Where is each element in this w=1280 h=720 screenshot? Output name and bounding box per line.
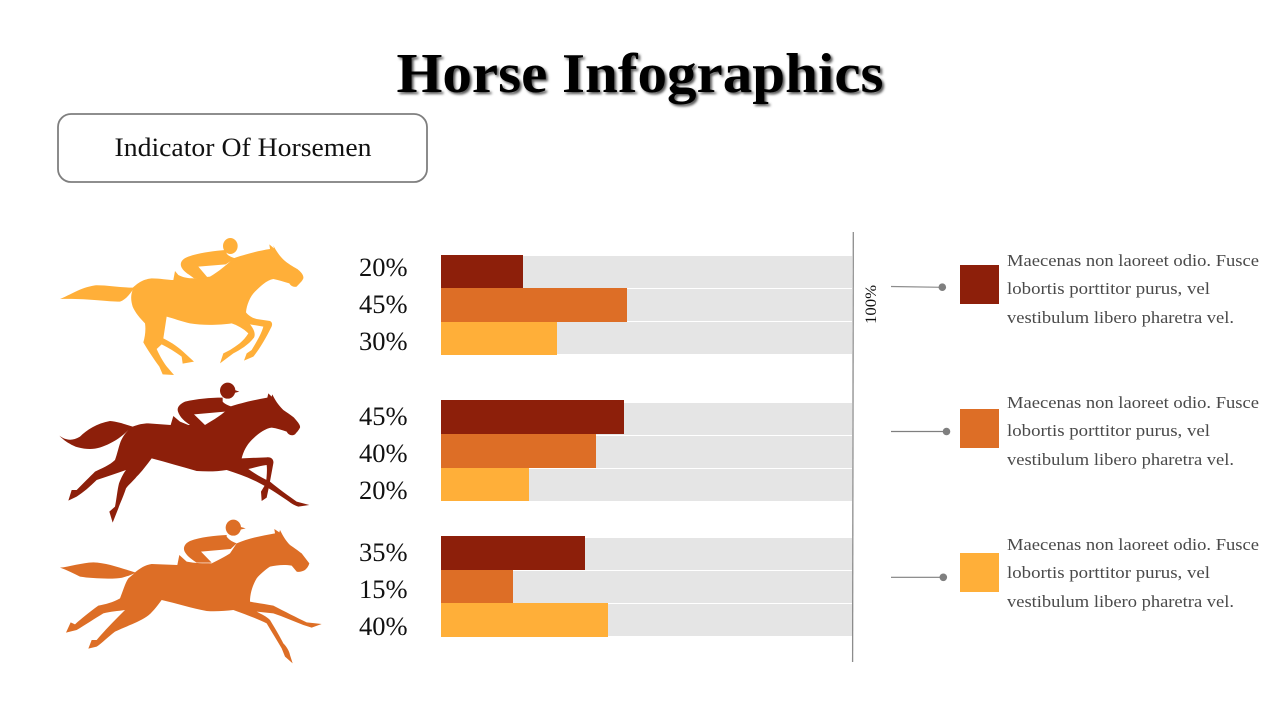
icon: yellow horse and rider silhouette — [60, 238, 303, 375]
percent labels: group 2: 45% — [359, 401, 408, 431]
text block 3: vestibulum libero pharetra vel. — [1007, 592, 1234, 611]
title: Horse Infographics — [396, 43, 884, 105]
connector 1 — [891, 283, 946, 291]
icon: dark red horse and rider silhouette — [59, 383, 309, 523]
legend swatch: orange — [960, 409, 999, 448]
axis line at 100% — [852, 232, 854, 662]
subtitle box: Indicator Of Horsemen — [58, 114, 427, 182]
percent labels: group 1: 45% — [359, 289, 408, 319]
percent labels: group 2: 40% — [359, 438, 408, 468]
text block 1 — [1007, 251, 1259, 327]
text block 2 — [1007, 393, 1259, 469]
percent labels: group 1: 20% — [359, 252, 408, 282]
title: Horse Infographics — [398, 45, 886, 107]
text block 2: vestibulum libero pharetra vel. — [1007, 450, 1234, 469]
percent labels: group 2: 20% — [359, 475, 408, 505]
bar chart: group 2 — [441, 400, 852, 501]
text block 1: lobortis porttitor purus, vel — [1007, 279, 1210, 298]
text block 3 — [1007, 535, 1259, 611]
subtitle box: Indicator Of Horsemen: Indicator Of Horsemen — [114, 133, 372, 162]
percent labels: group 3: 15% — [359, 574, 408, 604]
legend swatch: dark red — [960, 265, 999, 304]
percent labels: group 2 — [359, 401, 408, 505]
percent labels: group 1: 30% — [359, 326, 408, 356]
bar chart: group 3 — [441, 536, 852, 637]
percent labels: group 3: 40% — [359, 611, 408, 641]
percent labels: group 3 — [359, 537, 408, 641]
bar chart: group 1 — [441, 255, 852, 355]
connector 2 — [891, 428, 950, 435]
legend swatch: yellow — [960, 553, 999, 592]
text block 3: Maecenas non laoreet odio. Fusce — [1007, 535, 1259, 554]
text block 2: lobortis porttitor purus, vel — [1007, 421, 1210, 440]
axis label: 100%: 100% — [863, 285, 880, 324]
icon: orange horse and rider silhouette — [60, 520, 322, 663]
text block 1: Maecenas non laoreet odio. Fusce — [1007, 251, 1259, 270]
text block 3: lobortis porttitor purus, vel — [1007, 563, 1210, 582]
text block 2: Maecenas non laoreet odio. Fusce — [1007, 393, 1259, 412]
percent labels: group 3: 35% — [359, 537, 408, 567]
text block 1: vestibulum libero pharetra vel. — [1007, 308, 1234, 327]
connector 3 — [891, 574, 947, 581]
percent labels: group 1 — [359, 252, 408, 356]
